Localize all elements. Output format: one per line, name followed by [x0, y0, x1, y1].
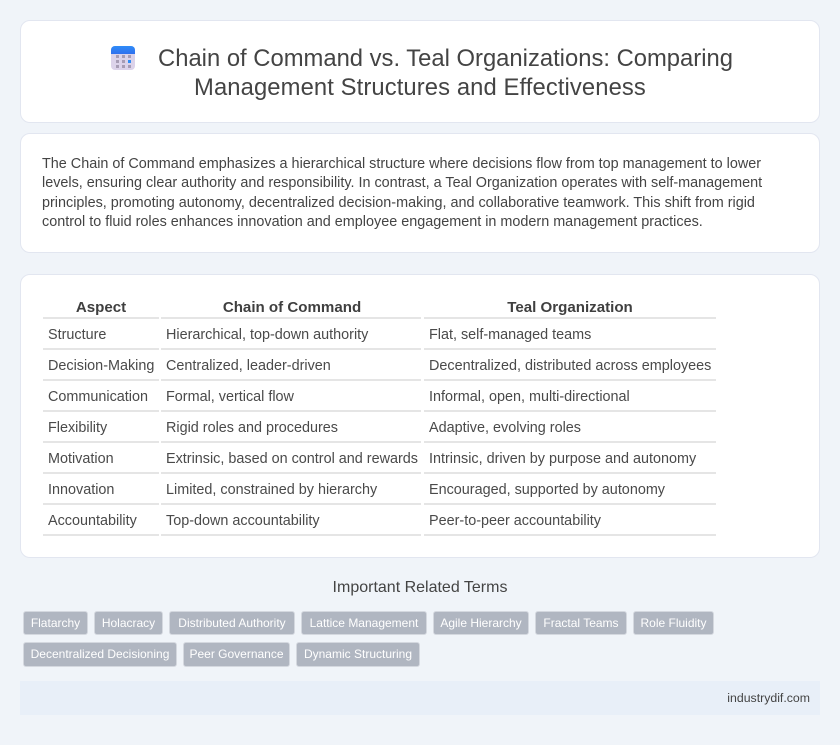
tag: Role Fluidity: [640, 616, 707, 630]
tag: [23, 642, 177, 667]
tag: Lattice Management: [310, 616, 418, 630]
tag: Agile Hierarchy: [440, 616, 522, 630]
tag: [94, 611, 163, 635]
comparison table: Decentralized, distributed across employees: [429, 358, 711, 374]
tag: Fractal Teams: [543, 616, 619, 630]
comparison table: Peer-to-peer accountability: [429, 513, 601, 529]
row: Innovation: Innovation: [48, 482, 114, 498]
comparison table: Formal, vertical flow: [166, 389, 294, 405]
table header: Aspect: Aspect: [76, 299, 126, 316]
title: Management Structures and Effectiveness: [194, 74, 646, 101]
heading: related terms: Important Related Terms: [333, 579, 507, 596]
tag: Peer Governance: [189, 647, 284, 661]
tag: [433, 611, 529, 635]
tag: [301, 611, 427, 635]
tag: [23, 611, 88, 635]
tag: Decentralized Decisioning: [31, 647, 169, 661]
intro paragraph: The Chain of Command emphasizes a hierarchical structure where decisions flow from top management to lower: [42, 156, 761, 172]
row: Decision-Making: Decision-Making: [48, 358, 154, 374]
comparison table: Informal, open, multi-directional: [429, 389, 630, 405]
comparison table: Intrinsic, driven by purpose and autonomy: [429, 451, 696, 467]
row: Accountability: Accountability: [48, 513, 137, 529]
row: Structure: Structure: [48, 327, 106, 343]
tag: [633, 611, 714, 635]
row: Communication: Communication: [48, 389, 148, 405]
table header: Chain of Command: Chain of Command: [223, 299, 361, 316]
comparison table: Rigid roles and procedures: [166, 420, 338, 436]
comparison table: Encouraged, supported by autonomy: [429, 482, 665, 498]
tag: [169, 611, 295, 635]
table header: Teal Organization: Teal Organization: [507, 299, 633, 316]
tag: [296, 642, 420, 667]
header card: [20, 20, 820, 123]
tag: [183, 642, 290, 667]
footer source: industrydif.com: [727, 691, 810, 705]
intro paragraph: [42, 156, 762, 230]
intro paragraph: principles, promoting autonomy, decentralized decision-making, and collaborative teamwork. This shift from rigid: [42, 195, 755, 211]
row: Flexibility: Flexibility: [48, 420, 107, 436]
tag: Dynamic Structuring: [304, 647, 412, 661]
comparison table: Flat, self-managed teams: [429, 327, 591, 343]
comparison table: Top-down accountability: [166, 513, 320, 529]
footer bar: [20, 681, 820, 715]
comparison table: Adaptive, evolving roles: [429, 420, 581, 436]
title: Chain of Command vs. Teal Organizations: Comparing: [158, 45, 733, 72]
panel: intro: [20, 133, 820, 253]
comparison table: [43, 299, 716, 536]
intro paragraph: levels, ensuring clear authority and responsibility. In contrast, a Teal Organization operates with self-management: [42, 175, 762, 191]
tag: Flatarchy: [31, 616, 80, 630]
comparison table: Hierarchical, top-down authority: [166, 327, 368, 343]
row: Motivation: Motivation: [48, 451, 114, 467]
tag: Holacracy: [102, 616, 155, 630]
comparison table: Centralized, leader-driven: [166, 358, 331, 374]
comparison table: Limited, constrained by hierarchy: [166, 482, 377, 498]
comparison table: Extrinsic, based on control and rewards: [166, 451, 418, 467]
title: [158, 45, 733, 101]
tag: [535, 611, 627, 635]
tag: Distributed Authority: [178, 616, 286, 630]
panel: comparison table: [20, 274, 820, 558]
related term tags: [23, 611, 714, 667]
icon: calendar: [111, 46, 135, 70]
intro paragraph: control to fluid roles enhances innovation and employee engagement in modern management practices.: [42, 214, 703, 230]
